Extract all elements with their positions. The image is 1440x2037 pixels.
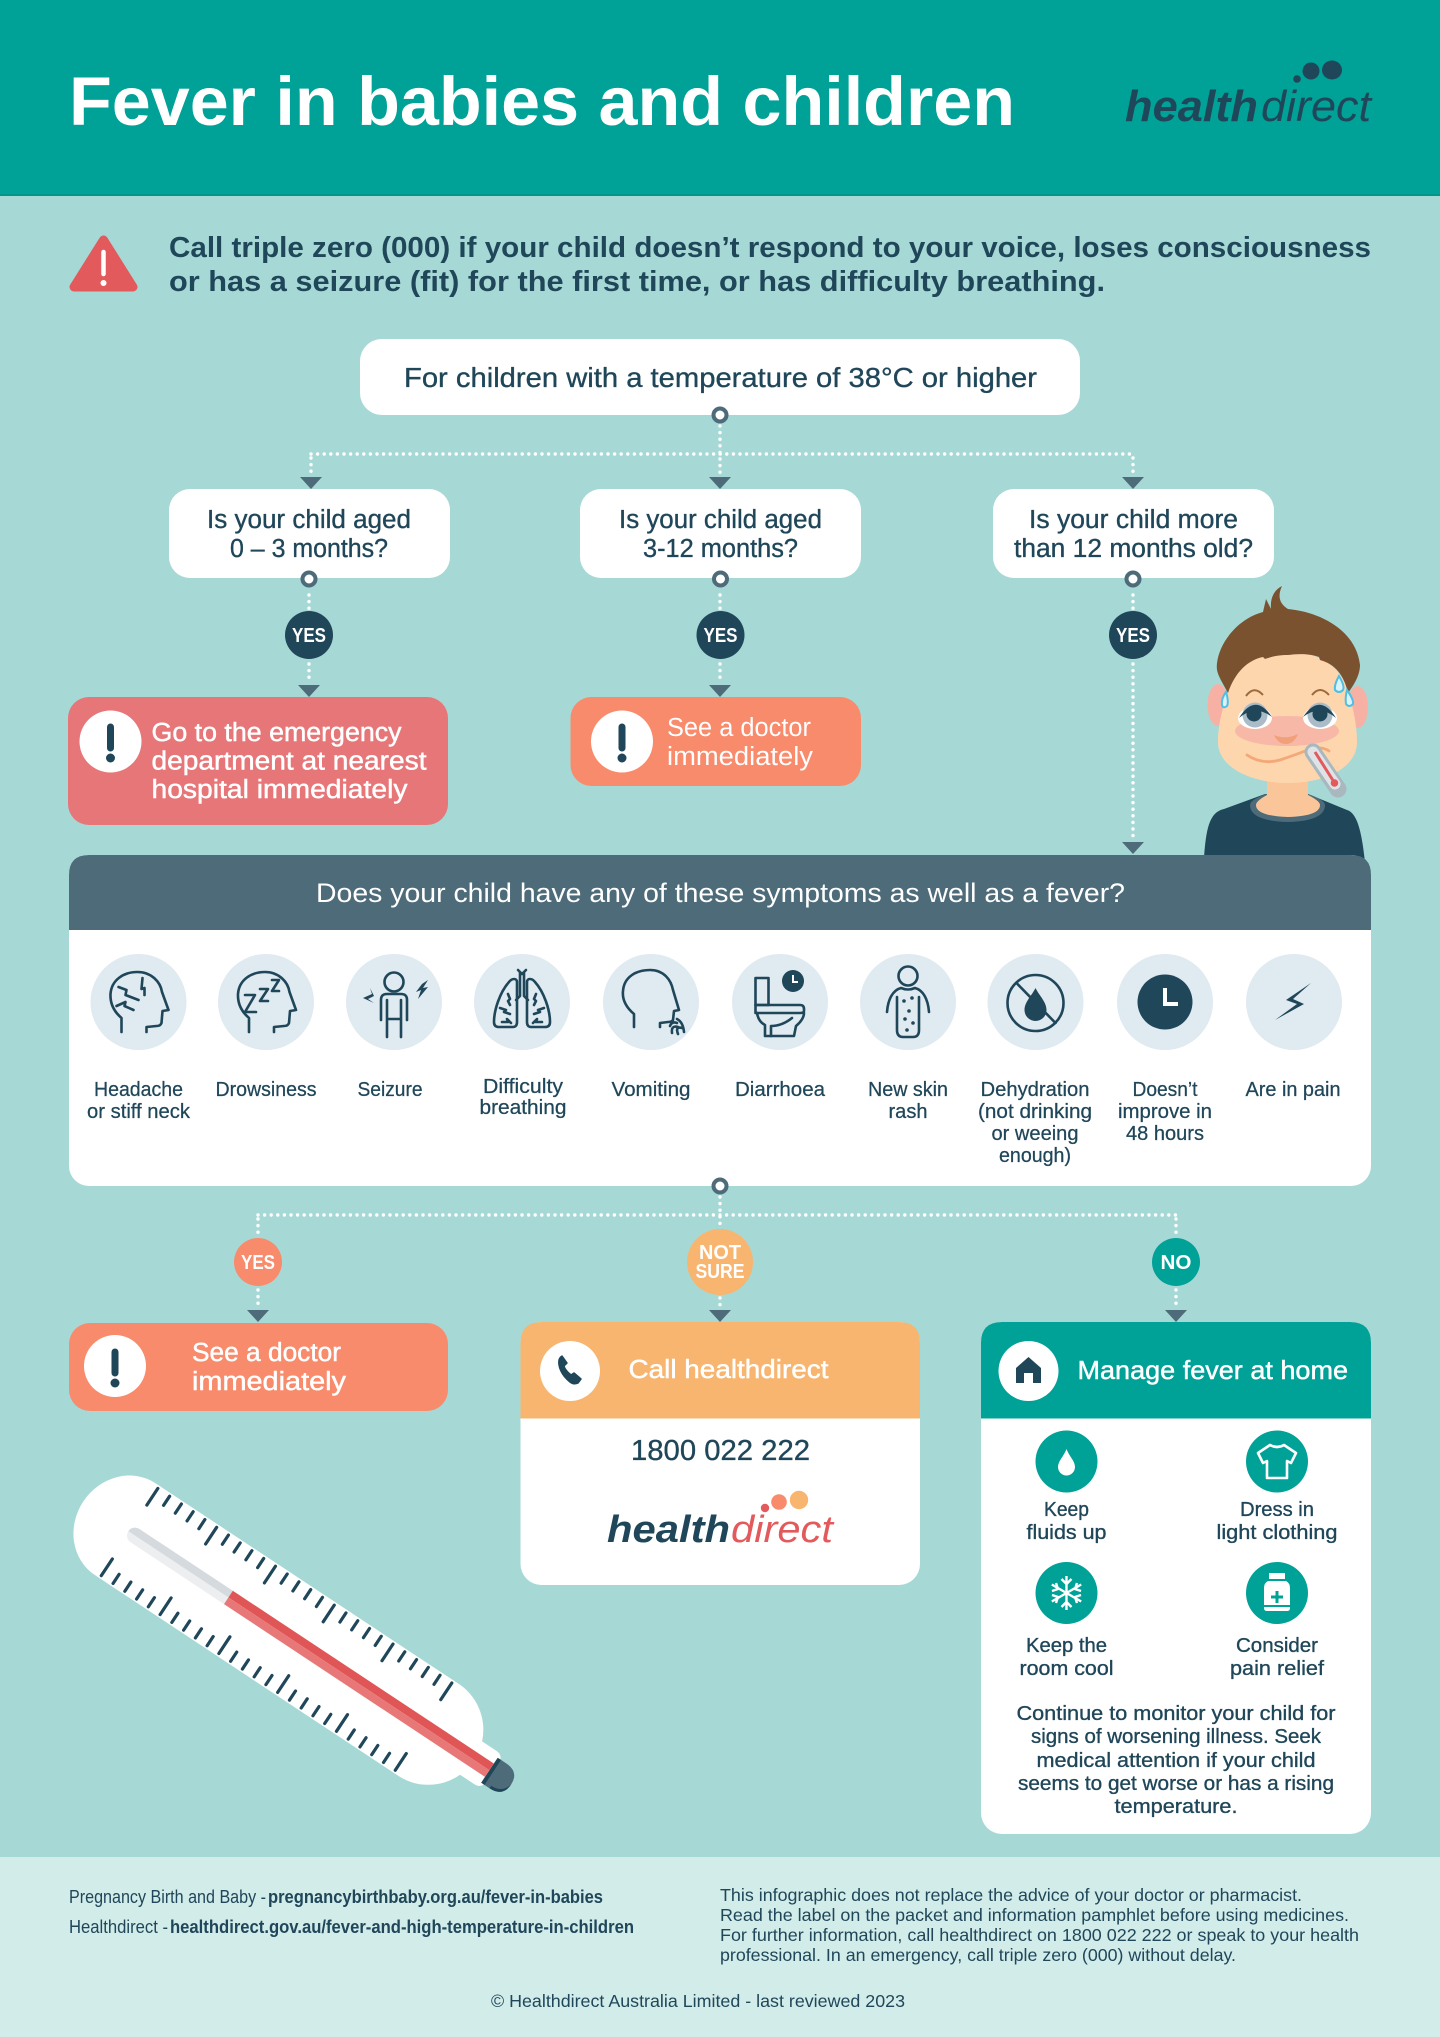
badge: not sure: SURE [696, 1261, 744, 1283]
icon: house [998, 1341, 1058, 1401]
disclaimer: For further information, call healthdirect on 1800 022 222 or speak to your health [720, 1925, 1359, 1945]
panel: manage fever at home: Manage fever at home [1078, 1355, 1348, 1385]
footer links: pregnancybirthbaby.org.au/fever-in-babies [268, 1887, 603, 1907]
tip: light clothing [1216, 1430, 1338, 1544]
symptom: difficulty breathing: Difficulty [483, 1075, 564, 1098]
logo: healthdirect colour: health [607, 1509, 730, 1551]
tip: keep room cool: room cool [1020, 1657, 1114, 1680]
box: age 3-12 months: Is your child aged [619, 506, 822, 534]
header band [0, 0, 1440, 196]
symptom: new skin rash: New skin [868, 1078, 948, 1101]
symptom: headache: Headache [94, 1078, 183, 1101]
copyright: © Healthdirect Australia Limited - last reviewed 2023 [491, 1991, 905, 2011]
box: temperature start: For children with a temperature of 38°C or higher [404, 362, 1037, 393]
emergency warning text [169, 232, 1371, 298]
badge: yes age 3-12 [696, 611, 744, 659]
badge: yes age 3-12: YES [704, 625, 738, 647]
symptom: drowsiness: Drowsiness [216, 1078, 316, 1101]
disclaimer [720, 1885, 1359, 1965]
box: age 3-12 months: 3-12 months? [643, 535, 798, 563]
symptom: seizure: Seizure [358, 1078, 422, 1101]
monitoring advice text [1016, 1702, 1336, 1818]
logo: healthdirect colour [607, 1491, 835, 1551]
symptom: in pain: Are in pain [1246, 1078, 1340, 1101]
tip: light clothing: light clothing [1216, 1521, 1338, 1544]
panel heading: symptoms question [69, 855, 1371, 930]
box: age 3-12 months [580, 489, 861, 578]
symptom: dehydration: enough) [999, 1144, 1071, 1167]
box: age over 12 months: than 12 months old? [1014, 535, 1253, 563]
symptom: no improvement in 48 hours [1117, 954, 1213, 1145]
tip: light clothing: Dress in [1240, 1498, 1314, 1521]
footer links: healthdirect.gov.au/fever-and-high-temperature-in-children [170, 1917, 634, 1937]
logo: healthdirect header: direct [1261, 82, 1373, 131]
tip: keep room cool: Keep the [1026, 1634, 1107, 1657]
box: age 0-3 months: Is your child aged [207, 506, 411, 534]
symptom: diarrhoea [732, 954, 828, 1101]
outcome: emergency department: hospital immediately [152, 776, 408, 804]
symptom: difficulty breathing [474, 954, 570, 1119]
monitoring advice text: seems to get worse or has a rising [1018, 1772, 1334, 1795]
flow connectors: symptoms to outcome [247, 1180, 1187, 1322]
symptom: diarrhoea: Diarrhoea [735, 1078, 826, 1101]
disclaimer: This infographic does not replace the advice of your doctor or pharmacist. [720, 1885, 1302, 1905]
icon: phone [540, 1341, 600, 1401]
symptom: no improvement in 48 hours: improve in [1118, 1100, 1212, 1123]
symptom: new skin rash [860, 954, 956, 1123]
badge: not sure: NOT [699, 1242, 741, 1264]
box: age 0-3 months: 0 – 3 months? [230, 535, 388, 563]
box: age over 12 months: Is your child more [1029, 506, 1238, 534]
badge: no: NO [1160, 1252, 1192, 1274]
footer links [69, 1887, 634, 1937]
symptom: new skin rash: rash [888, 1100, 928, 1123]
box: age 0-3 months [169, 489, 450, 578]
box: temperature start [360, 339, 1080, 422]
symptom: no improvement in 48 hours: Doesn’t [1132, 1078, 1198, 1101]
footer links: Pregnancy Birth and Baby - [69, 1887, 266, 1907]
symptom: dehydration: Dehydration [980, 1078, 1090, 1101]
tip: keep fluids up [1026, 1430, 1106, 1544]
title: Fever in babies and children [69, 63, 1015, 140]
panel: call healthdirect [520, 1322, 920, 1585]
tip: keep fluids up: fluids up [1026, 1521, 1106, 1544]
badge: yes over 12 [1109, 611, 1157, 659]
panel: symptoms [69, 855, 1371, 1186]
badge: yes age 0-3 [285, 611, 333, 659]
symptom: difficulty breathing: breathing [480, 1096, 566, 1119]
monitoring advice text: Continue to monitor your child for [1016, 1702, 1336, 1725]
panel: call healthdirect: Call healthdirect [628, 1354, 829, 1384]
logo: healthdirect colour: direct [731, 1509, 835, 1551]
symptom: seizure [346, 954, 442, 1101]
tip: pain relief: Consider [1236, 1634, 1318, 1657]
monitoring advice text: temperature. [1114, 1795, 1238, 1818]
flow connectors: top [300, 426, 1144, 489]
symptom: headache [87, 954, 191, 1123]
tip: pain relief: pain relief [1230, 1657, 1324, 1680]
symptom: dehydration [978, 954, 1092, 1167]
outcome: see a doctor (symptoms): See a doctor [192, 1339, 342, 1367]
symptom: drowsiness [216, 954, 316, 1101]
outcome: emergency department: department at nearest [152, 748, 426, 776]
badge: yes over 12: YES [1116, 625, 1150, 647]
badge: yes age 0-3: YES [292, 625, 326, 647]
badge: yes symptoms [234, 1238, 282, 1286]
outcome: see a doctor (3-12 months): See a doctor [667, 714, 811, 742]
illustration: large thermometer [53, 1456, 541, 1830]
badge: no [1152, 1238, 1200, 1286]
symptom: vomiting: Vomiting [612, 1078, 690, 1101]
outcome: see a doctor (symptoms) [69, 1323, 448, 1411]
outcome: see a doctor (3-12 months): immediately [667, 743, 813, 771]
outcome: see a doctor (3-12 months) [570, 697, 861, 786]
outcome: emergency department: Go to the emergency [152, 719, 402, 747]
outcome: see a doctor (symptoms): immediately [192, 1368, 346, 1396]
monitoring advice text: signs of worsening illness. Seek [1031, 1725, 1322, 1748]
badge: yes symptoms: YES [241, 1252, 275, 1274]
panel: manage fever at home [981, 1322, 1371, 1834]
logo: healthdirect header: health [1125, 82, 1258, 131]
tip: pain relief [1230, 1562, 1324, 1680]
emergency warning text: or has a seizure (fit) for the first time, or has difficulty breathing. [169, 266, 1105, 298]
tip: keep fluids up: Keep [1044, 1498, 1089, 1521]
symptom: in pain [1246, 954, 1342, 1101]
footer [0, 1857, 1440, 2037]
illustration: boy with thermometer [1204, 586, 1368, 862]
symptom: vomiting [603, 954, 699, 1101]
flow connectors: age to outcome [298, 572, 1144, 854]
symptom: headache: or stiff neck [87, 1100, 191, 1123]
symptom: no improvement in 48 hours: 48 hours [1126, 1122, 1204, 1145]
outcome: emergency department [68, 697, 448, 825]
tip: keep room cool [1020, 1562, 1114, 1680]
badge: not sure [687, 1229, 753, 1295]
box: age over 12 months [993, 489, 1274, 578]
footer links: Healthdirect - [69, 1917, 168, 1937]
symptom: dehydration: or weeing [992, 1122, 1078, 1145]
symptom: dehydration: (not drinking [978, 1100, 1092, 1123]
emergency warning text: Call triple zero (000) if your child doesn’t respond to your voice, loses consciousness [169, 232, 1371, 264]
panel heading: symptoms question: Does your child have any of these symptoms as well as a fever? [316, 878, 1125, 908]
panel: call healthdirect: 1800 022 222 [631, 1435, 810, 1467]
disclaimer: professional. In an emergency, call triple zero (000) without delay. [720, 1945, 1236, 1965]
disclaimer: Read the label on the packet and information pamphlet before using medicines. [720, 1905, 1349, 1925]
monitoring advice text: medical attention if your child [1036, 1749, 1316, 1772]
logo: healthdirect header [1125, 60, 1373, 131]
icon: warning triangle [74, 240, 133, 287]
